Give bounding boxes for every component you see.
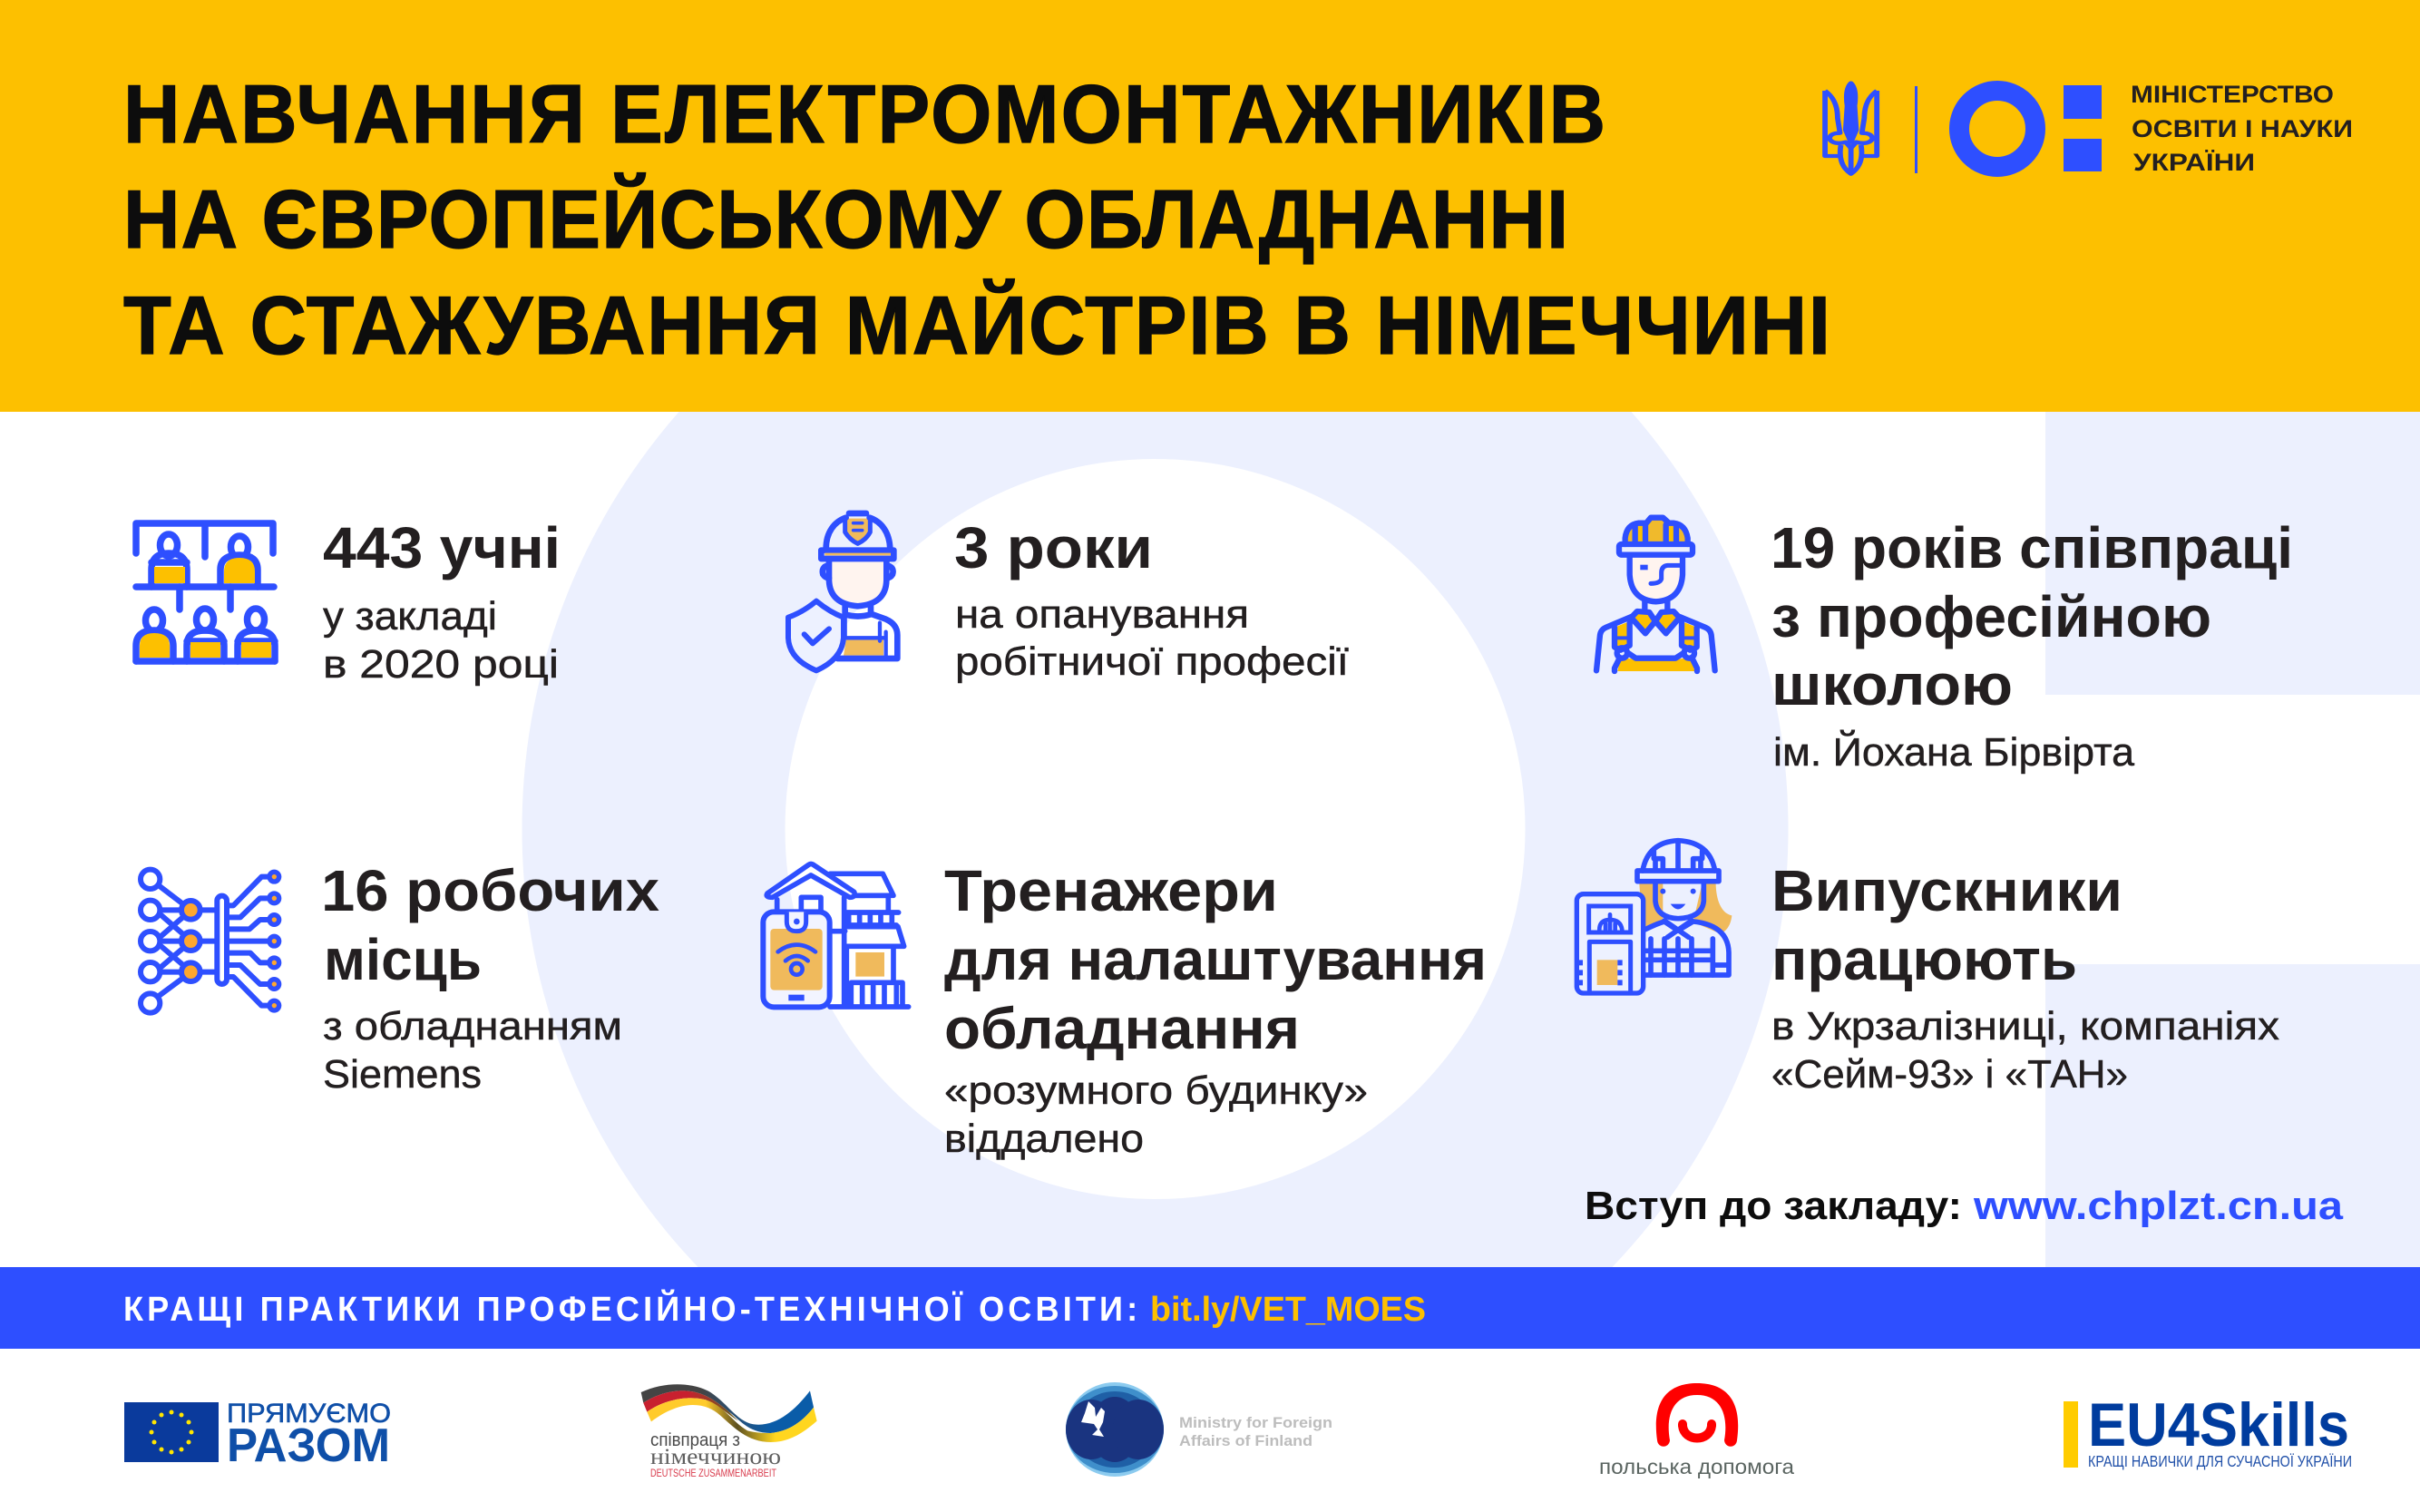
text: smart home remote: [944, 1068, 1368, 1161]
admission link: [1585, 1184, 2344, 1228]
text: employers: «Сейм-93» і «ТАН»: [1771, 1052, 2128, 1097]
logo: Ministry for Foreign Affairs of Finland: Affairs of Finland: [1179, 1432, 1312, 1449]
item: students: [136, 515, 561, 687]
heading: graduates work: [1771, 858, 2122, 992]
item: three years: [788, 513, 1349, 684]
title: [123, 68, 1830, 371]
logo: EU4Skills: EU4Skills: [2088, 1390, 2349, 1459]
logo: Polish Aid: польська допомога: [1599, 1455, 1794, 1478]
logo: ministry ring and colon: [1959, 85, 2102, 171]
heading: 16 workplaces: місць: [324, 927, 482, 992]
text: smart home remote: віддалено: [944, 1117, 1144, 1161]
text: Siemens equipment: Siemens: [323, 1052, 482, 1097]
heading: 3 years: 3 роки: [954, 515, 1153, 580]
text: employers: в Укрзалізниці, компаніях: [1771, 1004, 2279, 1049]
text: Siemens equipment: з обладнанням: [323, 1004, 622, 1049]
text: school name: ім. Йохана Бірвірта: [1773, 728, 2135, 775]
text: in the school: в 2020 році: [323, 642, 559, 687]
blue banner: [0, 1267, 2420, 1349]
icon: trident: [1825, 83, 1877, 174]
heading: graduates work: працюють: [1771, 927, 2077, 992]
item: workplaces: [141, 858, 659, 1097]
logo: EU Pryamuyemo Razom: ПРЯМУЄМО: [227, 1399, 391, 1429]
text: employers: [1771, 1004, 2279, 1097]
logo: EU4Skills: КРАЩІ НАВИЧКИ ДЛЯ СУЧАСНОЇ УКРАЇНИ: [2088, 1452, 2352, 1470]
item: trainers: [763, 858, 1487, 1161]
text: to master a trade: робітничої професії: [955, 639, 1349, 684]
text: in the school: [323, 594, 559, 687]
logo: cooperation with Germany: німеччиною: [650, 1445, 781, 1469]
flag ribbon: [641, 1384, 817, 1442]
heading: 16 workplaces: [321, 858, 659, 992]
heading: 443 students: 443 учні: [323, 515, 561, 580]
text: smart home remote: «розумного будинку»: [944, 1068, 1368, 1113]
blue banner: bit.ly/VET_MOES: [1150, 1291, 1426, 1329]
title: ТА СТАЖУВАННЯ МАЙСТРІВ В НІМЕЧЧИНІ: [123, 278, 1830, 371]
heading: years of cooperation: школою: [1771, 652, 2013, 717]
text: to master a trade: [955, 592, 1349, 684]
heading: trainers: [944, 858, 1487, 1061]
header band: [0, 0, 2420, 412]
logo: EU Pryamuyemo Razom: РАЗОМ: [227, 1419, 390, 1472]
logo: cooperation with Germany: співпраця з: [650, 1430, 740, 1450]
title: НАВЧАННЯ ЕЛЕКТРОМОНТАЖНИКІВ: [123, 68, 1605, 160]
item: nineteen years: [1596, 515, 2293, 775]
heading: years of cooperation: [1771, 515, 2293, 717]
heading: trainers: Тренажери: [944, 858, 1278, 923]
ministry name: [2131, 81, 2353, 176]
logo: Polish Aid: [1599, 1383, 1794, 1478]
logo: cooperation with Germany: DEUTSCHE ZUSAMMENARBEIT: [650, 1467, 777, 1479]
heading: graduates work: Випускники: [1771, 858, 2122, 923]
divider line: [1915, 86, 1917, 173]
logo: Ministry for Foreign Affairs of Finland: [1066, 1382, 1332, 1477]
text: to master a trade: на опанування: [955, 592, 1249, 637]
icon: students: [136, 523, 275, 661]
logo: cooperation with Germany: [641, 1384, 817, 1479]
heading: 16 workplaces: 16 робочих: [321, 858, 659, 923]
logo: Ministry for Foreign Affairs of Finland: Ministry for Foreign: [1179, 1414, 1332, 1431]
text: in the school: у закладі: [323, 594, 497, 639]
background decoration: ring and squares: [653, 327, 2420, 1331]
heading: trainers: обладнання: [944, 996, 1300, 1061]
title: НА ЄВРОПЕЙСЬКОМУ ОБЛАДНАННІ: [123, 172, 1568, 265]
blue banner: КРАЩІ ПРАКТИКИ ПРОФЕСІЙНО-ТЕХНІЧНОЇ ОСВІТИ:: [123, 1289, 1137, 1328]
icon: smart home: [763, 863, 909, 1007]
text: Siemens equipment: [323, 1004, 622, 1097]
ministry name: ОСВІТИ І НАУКИ: [2132, 115, 2353, 142]
heading: years of cooperation: 19 років співпраці: [1771, 515, 2293, 580]
icon: worker with shield: [788, 513, 897, 670]
admission link: Вступ до закладу:: [1585, 1184, 1962, 1228]
heading: years of cooperation: з професійною: [1771, 584, 2211, 649]
admission link: www.chplzt.cn.ua: [1973, 1184, 2344, 1228]
icon: circuit: [141, 870, 281, 1013]
icon: worker in overalls: [1596, 518, 1715, 671]
item: graduates: [1576, 841, 2279, 1097]
ministry name: МІНІСТЕРСТВО: [2131, 81, 2334, 108]
ministry name: УКРАЇНИ: [2133, 149, 2255, 176]
heading: trainers: для налаштування: [944, 927, 1487, 992]
icon: engineer with meter: [1576, 841, 1732, 993]
logo: EU Pryamuyemo Razom: [124, 1399, 391, 1472]
